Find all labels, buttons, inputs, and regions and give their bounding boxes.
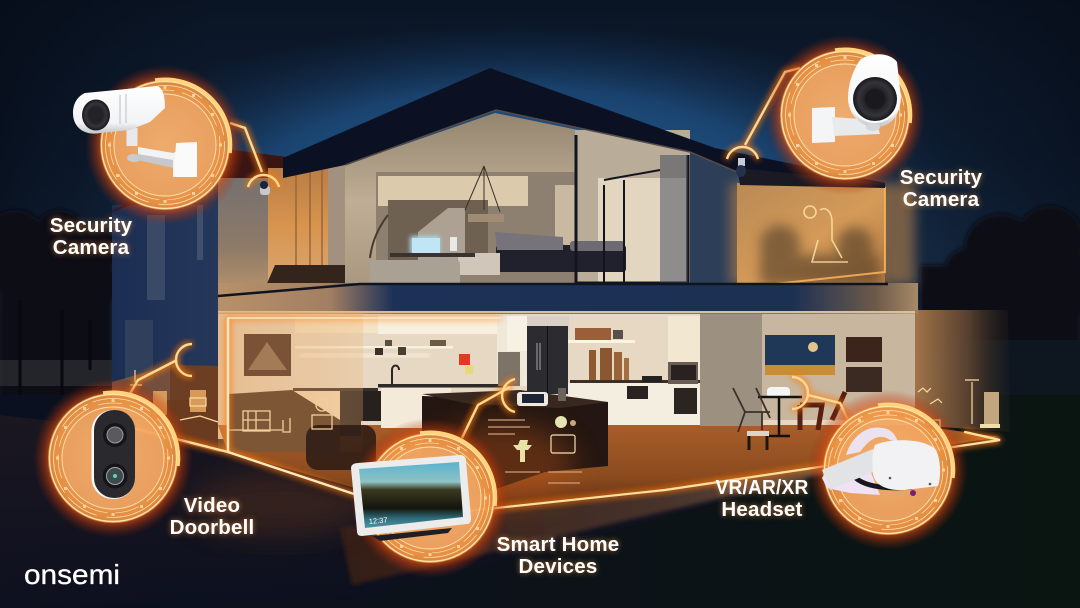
- icon: dome camera: [812, 54, 901, 143]
- icon: headset: [822, 427, 940, 496]
- house: upper storey left wall: [218, 165, 358, 293]
- house: left wing gable roof: [100, 150, 345, 217]
- panel: VR headset: [808, 390, 968, 550]
- house: upper right glass room with hologram: [730, 183, 915, 285]
- oven and counter: [292, 352, 520, 436]
- wood floor: [218, 425, 1000, 512]
- tablet on side table: [370, 215, 475, 286]
- left amber glass overlay: [218, 312, 376, 470]
- panel: smart home display: [350, 418, 510, 578]
- icon: smart display: [351, 455, 471, 541]
- label: video doorbell: Video: [184, 494, 240, 517]
- label: left security camera: Camera: [53, 236, 130, 259]
- island hologram icons: [488, 416, 582, 483]
- kitchen shelves: [295, 328, 635, 357]
- panel: left security camera: [73, 65, 245, 225]
- house: floor slab: [218, 283, 918, 314]
- label: smart home devices: Devices: [519, 555, 597, 578]
- right amber hologram extension: [915, 310, 1010, 432]
- label: left security camera: Security: [50, 214, 133, 237]
- glass door frame: [576, 135, 688, 283]
- connector: right security camera: [727, 68, 800, 159]
- ring: [765, 35, 925, 195]
- house: upper right wall: [690, 152, 737, 288]
- partition and right lounge wall: [700, 314, 915, 426]
- label: headset: VR/AR/XR: [716, 476, 808, 499]
- glowing floor outline: [133, 318, 1000, 514]
- house: main roof: [283, 68, 885, 188]
- panel: right security camera: [765, 35, 925, 195]
- panel: video doorbell: [33, 378, 193, 538]
- upper cabinets: [295, 316, 700, 386]
- label: left security camera: [50, 214, 133, 259]
- label: right security camera: Security: [900, 166, 983, 189]
- logo: onsemi: onsemi: [24, 559, 120, 590]
- connector: headset: [792, 377, 848, 420]
- left wall hologram panel with icons: [112, 365, 218, 452]
- house: upper room interior: [345, 113, 740, 290]
- pendant lamp: [465, 166, 504, 222]
- connector: video doorbell: [128, 344, 192, 397]
- label: right security camera: Camera: [903, 188, 980, 211]
- fridge: [527, 326, 568, 394]
- label: smart home devices: [497, 533, 619, 578]
- icon: doorbell: [92, 410, 135, 499]
- lower floor: kitchen and lounge: [218, 312, 1000, 512]
- kitchen island: [422, 388, 608, 507]
- label: headset: Headset: [721, 498, 803, 521]
- chopping boards and right kitchen: [568, 348, 700, 425]
- lounge table, chairs and projector: [733, 387, 845, 450]
- ground and deck: [0, 395, 1080, 608]
- icon: smart display: 12:37: [368, 515, 388, 526]
- ring: [808, 390, 968, 550]
- label: headset: [716, 476, 808, 521]
- ring: [33, 378, 193, 538]
- label: video doorbell: Doorbell: [170, 516, 254, 539]
- icon: bullet camera: [73, 86, 197, 177]
- background trees and lawn: [0, 206, 1080, 420]
- ring: [85, 65, 245, 225]
- label: smart home devices: Smart Home: [497, 533, 619, 556]
- mounted camera on left corner: [260, 181, 270, 195]
- mounted camera on right eave: [736, 158, 746, 177]
- connector: left security camera: [230, 123, 279, 187]
- label: video doorbell: [170, 494, 254, 539]
- house: left wing wall: [112, 205, 222, 400]
- label: right security camera: [900, 166, 983, 211]
- ring: [350, 418, 510, 578]
- sofa: [458, 232, 626, 275]
- connector: smart home device: [462, 379, 515, 438]
